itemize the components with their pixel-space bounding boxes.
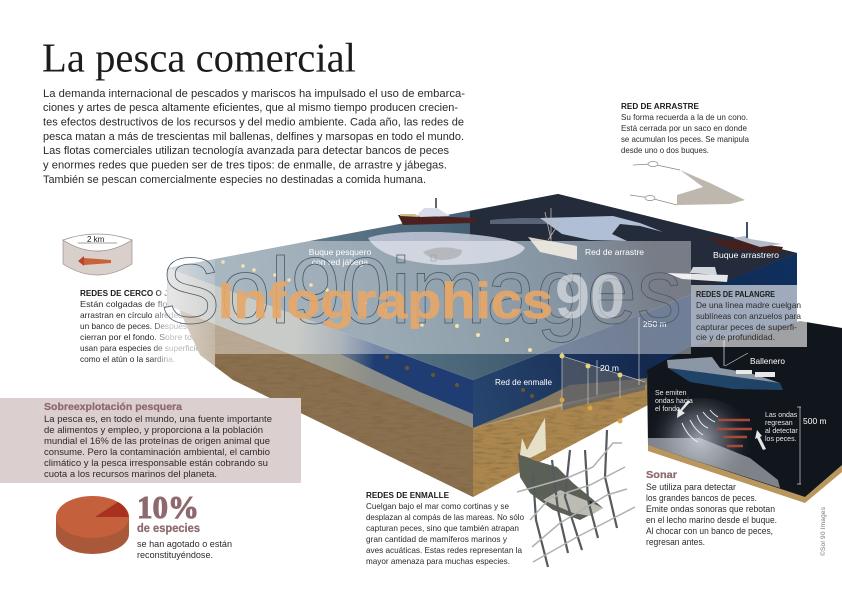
intro text: y enormes redes que pueden ser de tres tipos: de enmalle, de arrastre y jábegas. [43, 160, 447, 172]
water surface [167, 194, 797, 380]
panel: sonar text: regresan antes. [646, 537, 705, 547]
panel: red de arrastre text: se acumulan los peces. Se manipula [621, 134, 749, 144]
panel: redes de cerco text: usan para especies de superficie [80, 343, 200, 353]
panel: sobreexplotacion pesquera: consume. Pero la contaminación ambiental, el cambio [44, 447, 270, 457]
panel: sonar text: los grandes bancos de peces. [646, 493, 757, 503]
shallow water [167, 268, 473, 428]
panel: red de arrastre text [621, 101, 749, 155]
panel: sobreexplotacion pesquera: La pesca es, en todo el mundo, una fuente importante [44, 414, 272, 424]
yellow buoys [221, 260, 622, 378]
labels in illustration: regresan [765, 420, 793, 427]
intro text: Las flotas comerciales utilizan tecnología avanzada para detectar bancos de peces [43, 145, 449, 157]
sand in front of net [473, 378, 648, 428]
panel: redes de cerco text: un banco de peces. Después se [80, 321, 198, 331]
arrow: sound returning [755, 430, 766, 450]
panel: redes de palangre: De una línea madre cuelgan [696, 300, 801, 310]
panel: red de arrastre text: desde uno o dos buques. [621, 145, 709, 155]
panel: redes de enmalle text [366, 490, 524, 566]
panel: sobreexplotacion pesquera: de alimentos y empleo, y proporciona a la población [44, 425, 263, 435]
intro text: La demanda internacional de pescados y mariscos ha impulsado el uso de embarca- [43, 88, 465, 100]
detected fish [717, 420, 752, 446]
panel: sonar text: Se utiliza para detectar [646, 482, 736, 492]
whaler ship [667, 335, 783, 390]
panel: redes de palangre: sublíneas con anzuelos para [696, 311, 801, 321]
intro text: ciones y artes de pesca altamente eficientes, que al mismo tiempo producen crecien- [43, 102, 458, 114]
trawl net [540, 216, 663, 241]
panel: red de arrastre text: RED DE ARRASTRE [621, 101, 699, 111]
icon: ship buque pesquero [398, 198, 477, 225]
labels in illustration [309, 247, 827, 443]
labels in illustration: Se emiten [655, 390, 687, 397]
panel: redes de palangre: cie y de profundidad. [696, 332, 775, 342]
panel: sobreexplotacion pesquera: Sobreexplotación pesquera [44, 401, 182, 413]
labels in illustration: Red de arrastre [585, 247, 644, 257]
seabed front right [473, 385, 648, 497]
labels in illustration: Red de enmalle [495, 377, 552, 387]
pie chart 10% [56, 496, 129, 554]
panel: redes de enmalle text: gran cantidad de mamíferos marinos y [366, 534, 508, 544]
panel: redes de cerco text: arrastran en círculo alrededor de [80, 310, 202, 320]
panel: sonar text: en el lecho marino desde el buque. [646, 515, 777, 525]
icon: white boat [667, 267, 728, 282]
arrow: sound sent down [677, 400, 690, 418]
panel: redes de enmalle text: Cuelgan bajo el mar como cortinas y se [366, 501, 509, 511]
labels in illustration: 20 m [600, 363, 619, 373]
stat: 10% de especies: reconstituyéndose. [137, 550, 213, 560]
icon: trawl net [630, 162, 745, 205]
illustration: ocean block [167, 194, 797, 497]
watermark: white 90: 90 [555, 263, 625, 332]
panel: redes de enmalle text: mayor amenaza para muchas especies. [366, 556, 510, 566]
panel: sobreexplotacion pesquera: cuota a los recursos marinos del planeta. [44, 469, 217, 479]
icon: fish in net [517, 418, 635, 567]
icon: jabega cylinder 2 km [63, 234, 132, 275]
panel: redes de cerco text: Están colgadas de flotadores y [80, 299, 206, 309]
panel: sobreexplotacion pesquera [0, 398, 301, 483]
panel: redes de cerco text: REDES DE CERCO O JÁBEGA [80, 288, 198, 298]
labels in illustration: con red jábega [312, 257, 368, 267]
panel: sonar text [646, 469, 777, 547]
stat: 10% de especies [137, 489, 232, 560]
panel: redes de cerco text [80, 288, 213, 364]
seabed front left [167, 290, 473, 497]
watermark band [215, 241, 691, 354]
panel: redes de enmalle text: REDES DE ENMALLE [366, 490, 449, 500]
panel: redes de cerco text: como el atún o la sardina. [80, 354, 175, 364]
panel: redes de enmalle text: aves acuáticas. Estas redes representan la [366, 545, 522, 555]
stat: 10% de especies: se han agotado o están [137, 539, 232, 549]
labels in illustration: el fondo. [655, 406, 682, 413]
stat: 10% de especies: 10% [137, 489, 199, 525]
jabega net [368, 232, 525, 265]
intro text: También se pescan comercialmente especies no destinadas a comida humana. [43, 174, 426, 186]
panel: sonar text: Al chocar con un banco de peces, [646, 526, 773, 536]
labels in illustration: Buque pesquero [309, 247, 371, 257]
watermark: Sol90images outline: Sol90images [160, 238, 682, 343]
sonar waves [682, 410, 718, 442]
icon: ship buque arrastrero [705, 222, 783, 253]
panel: redes de enmalle text: desplazan al compás de las mareas. No sólo [366, 512, 524, 522]
title: La pesca comercial [42, 34, 356, 80]
panel: sonar text: Sonar [646, 469, 677, 481]
credit: ©Sol 90 Images [819, 506, 827, 556]
labels in illustration: 500 m [803, 416, 827, 426]
watermark: Infographics: Infographics [218, 273, 553, 329]
gill net [562, 356, 645, 410]
panel: redes de cerco text: cierran por el fondo. Sobre todo se [80, 332, 213, 342]
intro text: pesca matan a más de trescientas mil ballenas, delfines y marsopas en todo el mundo. [43, 131, 464, 143]
seabed buoys [385, 355, 534, 398]
panel: sobreexplotacion pesquera: climático y la pesca irresponsable están cobrando su [44, 458, 268, 468]
intro text [43, 88, 465, 186]
panel: sonar text: Emite ondas sonoras que rebotan [646, 504, 775, 514]
depth line 500 m [797, 407, 801, 484]
panel: sobreexplotacion pesquera: mundial el 16% de las proteínas de origen animal que [44, 436, 270, 446]
icon: fishing boat [528, 208, 577, 260]
sand strip on seabed [290, 354, 473, 428]
illustration: sonar block [645, 321, 842, 503]
intro text: tes efectos destructivos de los recursos y del medio ambiente. Cada año, las redes de [43, 116, 464, 128]
panel: redes de palangre: REDES DE PALANGRE [696, 290, 776, 299]
panel: redes de palangre: capturar peces de superfi- [696, 322, 797, 332]
labels in illustration: Ballenero [750, 356, 785, 366]
deep water [473, 253, 797, 428]
watermark fade left [150, 241, 215, 380]
labels in illustration: los peces. [765, 436, 797, 443]
panel: redes de enmalle text: capturan peces, sino que también atrapan [366, 523, 519, 533]
depth line 250 m and 20 m [597, 317, 639, 395]
dark back of surface [470, 194, 797, 295]
stat: 10% de especies: de especies [137, 523, 200, 535]
panel: redes de palangre [691, 285, 807, 347]
labels in illustration: Buque arrastrero [713, 250, 779, 260]
labels in illustration: ondas hacia [655, 398, 693, 405]
labels in illustration: 250 m [643, 319, 667, 329]
panel: red de arrastre text: Está cerrada por un saco en donde [621, 123, 747, 133]
labels in illustration: Las ondas [765, 412, 798, 419]
panel: red de arrastre text: Su forma recuerda a la de un cono. [621, 112, 748, 122]
icon: jabega cylinder 2 km: 2 km [87, 235, 105, 244]
labels in illustration: al detectar [765, 428, 798, 435]
